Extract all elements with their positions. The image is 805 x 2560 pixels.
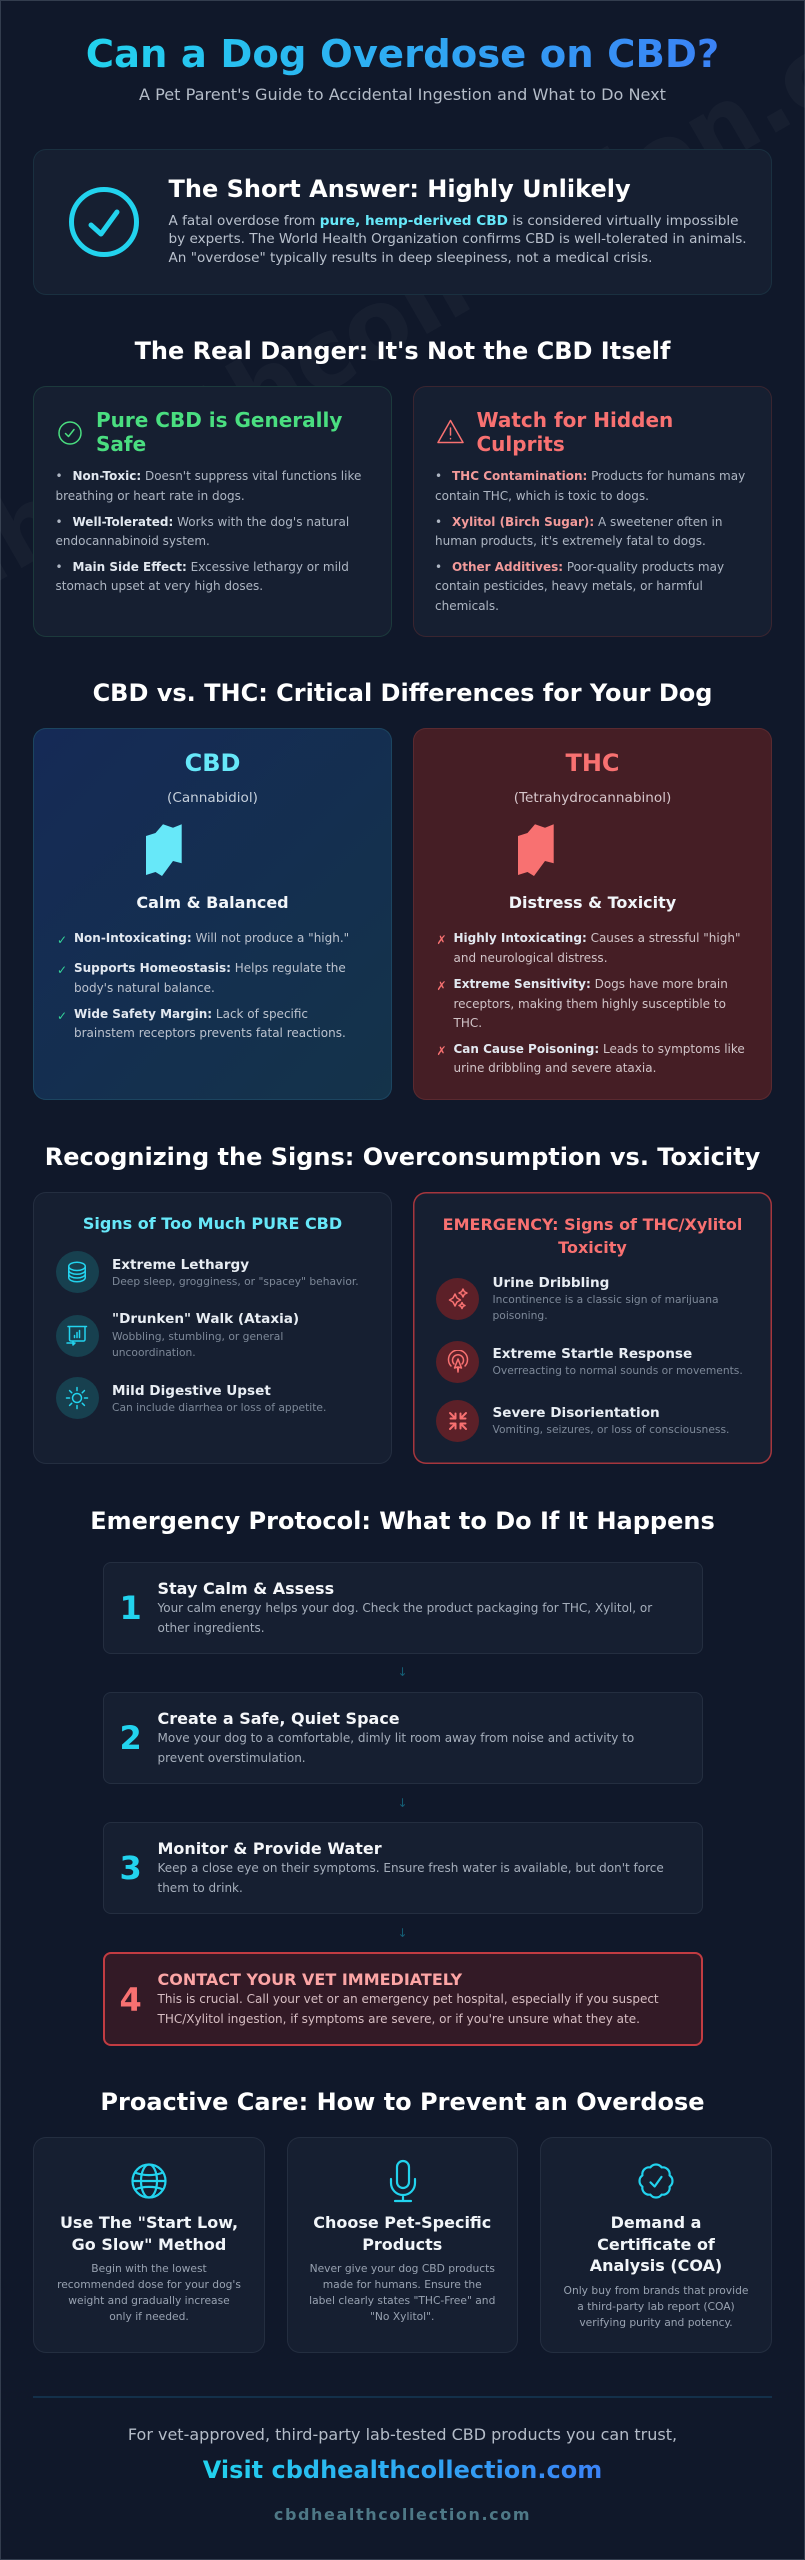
item: safety margin [57, 1007, 346, 1040]
text: urine detail: poisoning. [492, 1309, 548, 1322]
list: culprits: human products, it's extremely fatal to dogs. [435, 534, 706, 548]
heading: distress: Distress & Toxicity [509, 893, 676, 912]
heading: hidden culprits [476, 408, 673, 456]
heading: step 2: Create a Safe, Quiet Space [158, 1709, 400, 1728]
arrow: ↓ [397, 1796, 408, 1810]
heading: start low: Use The "Start Low, [60, 2213, 238, 2232]
list: safe points: breathing or heart rate in dogs. [56, 489, 245, 503]
text: step 3 [158, 1861, 664, 1895]
text: COA: Only buy from brands that provide [564, 2284, 748, 2297]
heading: hidden culprits: Watch for Hidden [476, 408, 673, 432]
list: safe points [56, 469, 361, 593]
text: lethargy detail: Deep sleep, grogginess, or "spacey" behavior. [112, 1275, 359, 1288]
icon: calm shape [146, 824, 182, 876]
text: Tetrahydrocannabinol: (Tetrahydrocannabinol) [514, 790, 671, 806]
icon: chart [56, 1315, 98, 1357]
text: step 4: THC/Xylitol ingestion, if symptoms are severe, or if you're unsure what they ate. [158, 2012, 640, 2026]
text: step 3: them to drink. [158, 1881, 243, 1895]
heading: emergency signs: Toxicity [558, 1238, 627, 1256]
heading: THC: THC [565, 749, 620, 777]
list: safe points: • [56, 515, 63, 529]
panel: short answer [33, 149, 772, 295]
text: COA [564, 2284, 748, 2329]
brand: cbdhealthcollection.com [274, 2505, 531, 2524]
list: culprits: contain THC, which is toxic to dogs. [435, 489, 649, 503]
text: digestive detail: Can include diarrhea or loss of appetite. [112, 1401, 326, 1414]
item: disorientation [436, 1400, 729, 1442]
text: disorientation: Severe Disorientation [492, 1405, 660, 1421]
heading: pure CBD: Safe [96, 432, 146, 456]
icon: warning triangle [437, 420, 464, 444]
icon: globe [131, 2163, 167, 2199]
list: culprits: Other Additives: Poor-quality products may [452, 560, 724, 574]
icon: arrows in [436, 1400, 479, 1442]
list: safe points: • [56, 560, 63, 574]
text: disorientation detail: Vomiting, seizures, or loss of consciousness. [492, 1423, 729, 1436]
item: urine dribbling [436, 1275, 719, 1322]
list: culprits: THC Contamination: Products for humans may [452, 469, 745, 483]
icon: sun [56, 1377, 98, 1419]
panel: step 1 [102, 1562, 702, 1654]
item: homeostasis [57, 961, 346, 995]
heading: emergency signs [443, 1214, 742, 1256]
text: COA: a third-party lab report (COA) [577, 2300, 735, 2313]
item: homeostasis: Supports Homeostasis: Helps regulate the [74, 961, 346, 975]
text: short answer body [168, 212, 747, 266]
heading: step 1: Stay Calm & Assess [158, 1579, 334, 1598]
text: step 2: Move your dog to a comfortable, dimly lit room away from noise and activity to [158, 1731, 634, 1745]
text: start low: only if needed. [109, 2310, 189, 2323]
heading: pure CBD: Pure CBD is Generally [96, 408, 342, 432]
icon: cursor rays [436, 1341, 479, 1383]
heading: pure CBD [96, 408, 342, 456]
panel: step 3 [102, 1822, 702, 1914]
text: start low: recommended dose for your dog's [57, 2278, 241, 2291]
text: step 1: other ingredients. [158, 1621, 265, 1635]
heading: CBD vs THC: CBD vs. THC: Critical Differences for Your Dog [93, 679, 712, 707]
number 4: 4 [120, 1981, 142, 2019]
panel: CBD: ✓ [57, 1009, 67, 1023]
number 1: 1 [120, 1589, 142, 1627]
text: ataxia detail: Wobbling, stumbling, or general [112, 1330, 283, 1343]
heading: COA [590, 2213, 722, 2275]
icon: database [56, 1251, 98, 1293]
item: intoxicating [436, 931, 740, 965]
text: start low: weight and gradually increase [68, 2294, 230, 2307]
text: pet-specific: made for humans. Ensure the [323, 2278, 482, 2291]
panel: pure CBD safe [33, 386, 392, 637]
text: pet-specific: label clearly states "THC-Free" and [309, 2294, 495, 2307]
text: urine detail: Incontinence is a classic sign of marijuana [492, 1293, 719, 1306]
text: urine detail [492, 1293, 719, 1322]
arrow: ↓ [397, 1665, 408, 1679]
list: culprits: contain pesticides, heavy metals, or harmful [435, 579, 703, 593]
text: footer lead-in: For vet-approved, third-party lab-tested CBD products you can trust, [128, 2425, 677, 2444]
panel: step 2 [102, 1692, 702, 1784]
list: culprits: chemicals. [435, 599, 499, 613]
text: step 4: This is crucial. Call your vet or an emergency pet hospital, especially if you suspect [158, 1992, 659, 2006]
text: pet-specific: "No Xylitol". [370, 2310, 434, 2323]
icon: microphone [390, 2160, 416, 2202]
item: sensitivity: receptors, making them highly susceptible to [454, 997, 726, 1011]
text: start low [57, 2262, 241, 2323]
heading: pet-specific [313, 2213, 491, 2254]
panel: THC [413, 728, 772, 1100]
item: safety margin: Wide Safety Margin: Lack of specific [74, 1007, 308, 1021]
heading: COA: Certificate of [597, 2234, 715, 2254]
text: lethargy: Extreme Lethargy [112, 1257, 249, 1273]
icon: sparkles [436, 1278, 479, 1320]
item: lethargy [56, 1251, 359, 1293]
item: intoxicating: and neurological distress. [454, 951, 608, 965]
item: homeostasis: body's natural balance. [74, 981, 215, 995]
subtitle: A Pet Parent's Guide to Accidental Ingestion and What to Do Next [139, 85, 666, 104]
list: safe points: stomach upset at very high doses. [56, 579, 263, 593]
icon: check circle [69, 187, 139, 257]
text: pet-specific [309, 2262, 495, 2323]
list: culprits: • [435, 560, 442, 574]
heading: emergency signs: EMERGENCY: Signs of THC/Xylitol [443, 1214, 742, 1234]
text: ataxia detail [112, 1330, 283, 1359]
text: startle: Extreme Startle Response [492, 1346, 692, 1362]
item: safety margin: brainstem receptors prevents fatal reactions. [74, 1026, 346, 1040]
heading: step 3: Monitor & Provide Water [158, 1839, 382, 1858]
list: safe points: Main Side Effect: Excessive lethargy or mild [72, 560, 349, 574]
text: ataxia: "Drunken" Walk (Ataxia) [112, 1311, 299, 1327]
text: step 3: Keep a close eye on their symptoms. Ensure fresh water is available, but don't force [158, 1861, 664, 1875]
item: poisoning [436, 1042, 745, 1075]
heading: pet-specific: Choose Pet-Specific [313, 2213, 491, 2232]
text: COA: verifying purity and potency. [579, 2316, 733, 2329]
text: short answer body: An "overdose" typically results in deep sleepiness, not a medical crisis. [168, 250, 652, 266]
panel: pet-specific [286, 2137, 518, 2353]
item: sensitivity: Extreme Sensitivity: Dogs have more brain [454, 977, 728, 991]
list: safe points: • [56, 469, 63, 483]
panel: THC: ✗ [436, 979, 447, 993]
item: intoxicating: Highly Intoxicating: Causes a stressful "high" [454, 931, 740, 945]
panel: THC emergency signs [413, 1192, 772, 1464]
list: culprits: Xylitol (Birch Sugar): A sweetener often in [452, 515, 722, 529]
panel: THC: ✗ [436, 933, 447, 947]
heading: COA: Analysis (COA) [590, 2256, 722, 2275]
heading: CBD: CBD [185, 749, 240, 777]
number 2: 2 [120, 1719, 142, 1757]
heading: COA: Demand a [611, 2213, 701, 2232]
item: sensitivity: THC. [454, 1016, 482, 1030]
item: sensitivity [436, 977, 728, 1030]
panel: start low [33, 2137, 265, 2353]
text: digestive: Mild Digestive Upset [112, 1383, 271, 1399]
heading: start low: Go Slow" Method [72, 2234, 226, 2254]
list: culprits: • [435, 515, 442, 529]
heading: pet-specific: Products [362, 2234, 442, 2254]
number 3: 3 [120, 1849, 142, 1887]
heading: signs CBD: Signs of Too Much PURE CBD [83, 1214, 342, 1233]
icon: distress shape [518, 824, 554, 876]
heading: emergency protocol: Emergency Protocol: What to Do If It Happens [90, 1507, 715, 1535]
panel: CBD [33, 728, 392, 1100]
list: culprits: • [435, 469, 442, 483]
text: step 1 [158, 1601, 652, 1635]
text: startle detail: Overreacting to normal sounds or movements. [492, 1364, 743, 1377]
panel: CBD: ✓ [57, 963, 67, 977]
item: digestive upset [56, 1377, 326, 1419]
text: step 2 [158, 1731, 634, 1765]
text: ataxia detail: uncoordination. [112, 1346, 196, 1359]
text: start low: Begin with the lowest [91, 2262, 207, 2275]
arrow: ↓ [397, 1926, 408, 1940]
item: poisoning: urine dribbling and severe ataxia. [454, 1061, 656, 1075]
panel: THC: ✗ [436, 1044, 447, 1058]
heading: proactive care: Proactive Care: How to Prevent an Overdose [100, 2088, 705, 2116]
list: culprits [435, 469, 745, 613]
text: step 2: prevent overstimulation. [158, 1751, 306, 1765]
heading: short answer: The Short Answer: Highly Unlikely [168, 175, 631, 203]
text: urine: Urine Dribbling [492, 1275, 609, 1291]
icon: badge check [638, 2163, 674, 2199]
panel: COA [540, 2137, 772, 2353]
item: non-intoxicating: Non-Intoxicating: Will not produce a "high." [74, 931, 349, 945]
heading: start low [60, 2213, 238, 2254]
panel: hidden culprits [413, 386, 772, 637]
text: pet-specific: Never give your dog CBD products [310, 2262, 495, 2275]
heading: hidden culprits: Culprits [476, 432, 565, 456]
item: ataxia [56, 1311, 299, 1359]
title: Can a Dog Overdose on CBD? [86, 32, 719, 77]
heading: recognizing the signs: Recognizing the Signs: Overconsumption vs. Toxicity [45, 1143, 760, 1171]
panel: CBD: ✓ [57, 933, 67, 947]
heading: real danger: The Real Danger: It's Not the CBD Itself [135, 337, 670, 365]
list: safe points: endocannabinoid system. [56, 534, 210, 548]
icon: green check [58, 421, 82, 445]
call to action: Visit cbdhealthcollection.com [203, 2456, 602, 2484]
panel: too much pure CBD [33, 1192, 392, 1464]
text: short answer body: A fatal overdose from pure, hemp-derived CBD is considered virtually impossible [168, 212, 739, 228]
list: safe points: Well-Tolerated: Works with the dog's natural [72, 515, 349, 529]
item: startle [436, 1341, 743, 1383]
text: step 1: Your calm energy helps your dog. Check the product packaging for THC, Xylitol, or [158, 1601, 652, 1615]
heading: calm: Calm & Balanced [136, 893, 289, 912]
heading: step 4: CONTACT YOUR VET IMMEDIATELY [158, 1970, 462, 1989]
list: safe points: Non-Toxic: Doesn't suppress vital functions like [72, 469, 361, 483]
item: poisoning: Can Cause Poisoning: Leads to symptoms like [454, 1042, 745, 1056]
text: Cannabidiol: (Cannabidiol) [167, 790, 258, 806]
panel: step 4 [102, 1952, 702, 2046]
text: step 4 [157, 1992, 659, 2026]
text: short answer body: by experts. The World Health Organization confirms CBD is well-tolerated in animals. [168, 231, 747, 247]
